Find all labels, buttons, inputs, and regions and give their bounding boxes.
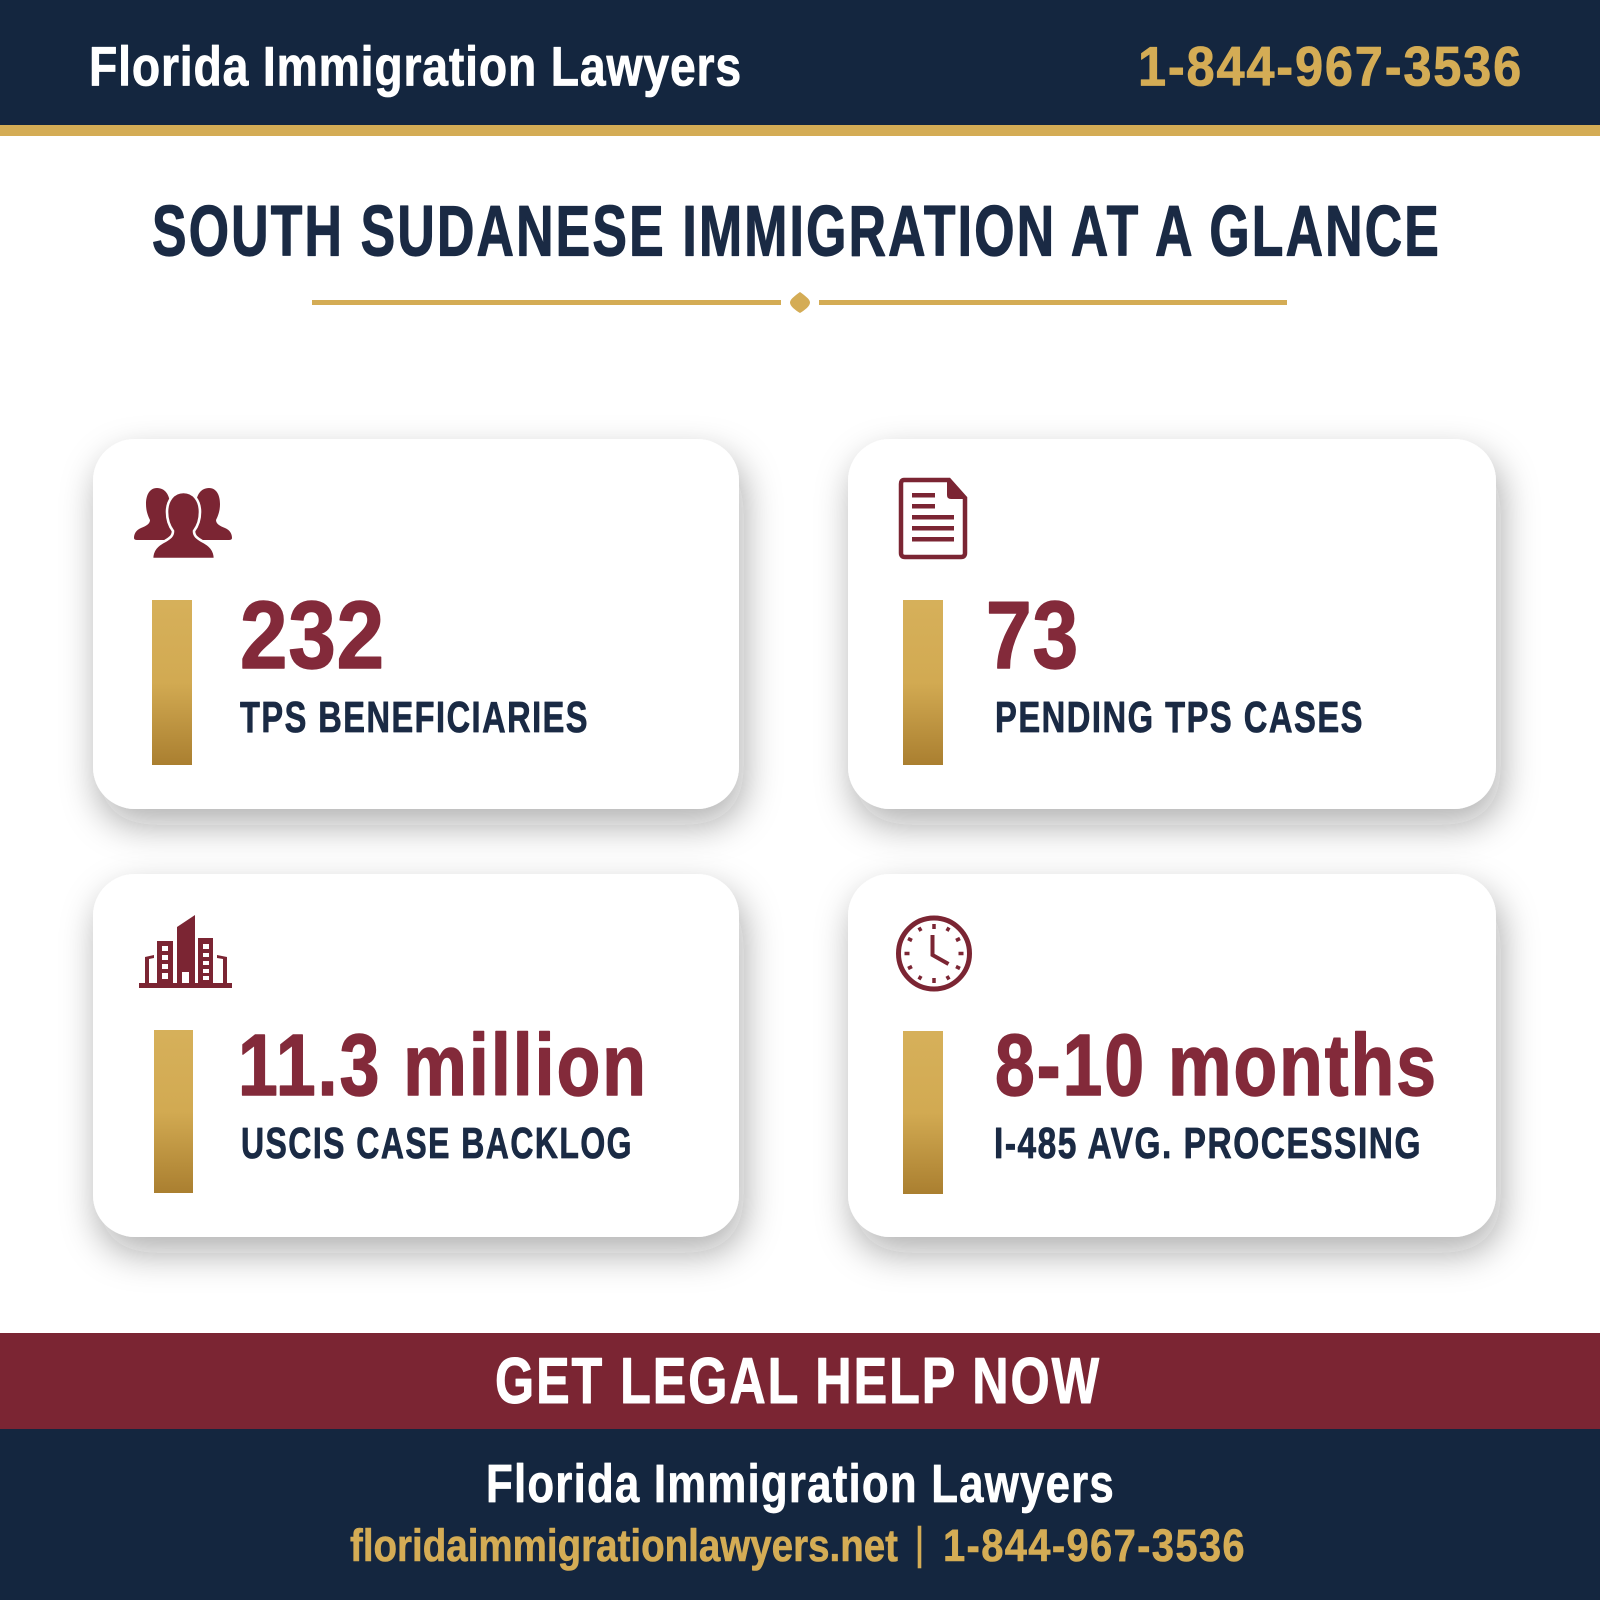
- stat: 73: 73: [986, 582, 1079, 689]
- icon: document: [901, 480, 965, 557]
- accent bar: [154, 1030, 193, 1193]
- icon: clock: [898, 918, 970, 989]
- icon: city buildings: [139, 915, 232, 988]
- panel: TPS beneficiaries: [93, 439, 739, 809]
- label: USCIS case backlog: USCIS CASE BACKLOG: [241, 1119, 633, 1168]
- accent bar: [903, 600, 943, 765]
- call to action band: [0, 1333, 1600, 1429]
- panel: pending TPS cases: [848, 439, 1496, 809]
- call to action text: GET LEGAL HELP NOW: [495, 1344, 1101, 1417]
- accent bar: [903, 1031, 943, 1194]
- footer website and phone: floridaimmigrationlawyers.net: [350, 1520, 898, 1571]
- panel: USCIS case backlog: [93, 874, 739, 1237]
- header firm name: Florida Immigration Lawyers: [89, 34, 742, 98]
- label: pending TPS cases: PENDING TPS CASES: [995, 693, 1364, 742]
- stat: 232: 232: [240, 582, 385, 689]
- footer: [0, 1429, 1600, 1600]
- accent bar: [152, 600, 192, 765]
- header phone number: 1-844-967-3536: [1138, 34, 1523, 98]
- stat: 11.3 million: 11.3 million: [238, 1017, 648, 1114]
- title divider: [312, 292, 1287, 313]
- header bar: [0, 0, 1600, 136]
- footer firm name: Florida Immigration Lawyers: [486, 1454, 1115, 1514]
- label: I-485 avg. processing: I-485 AVG. PROCESSING: [994, 1119, 1422, 1168]
- label: TPS beneficiaries: TPS BENEFICIARIES: [240, 693, 589, 742]
- footer website and phone: 1-844-967-3536: [943, 1520, 1246, 1571]
- stat: 8-10 months: 8-10 months: [995, 1017, 1438, 1114]
- icon: people: [134, 488, 232, 559]
- panel: I-485 processing: [848, 874, 1496, 1237]
